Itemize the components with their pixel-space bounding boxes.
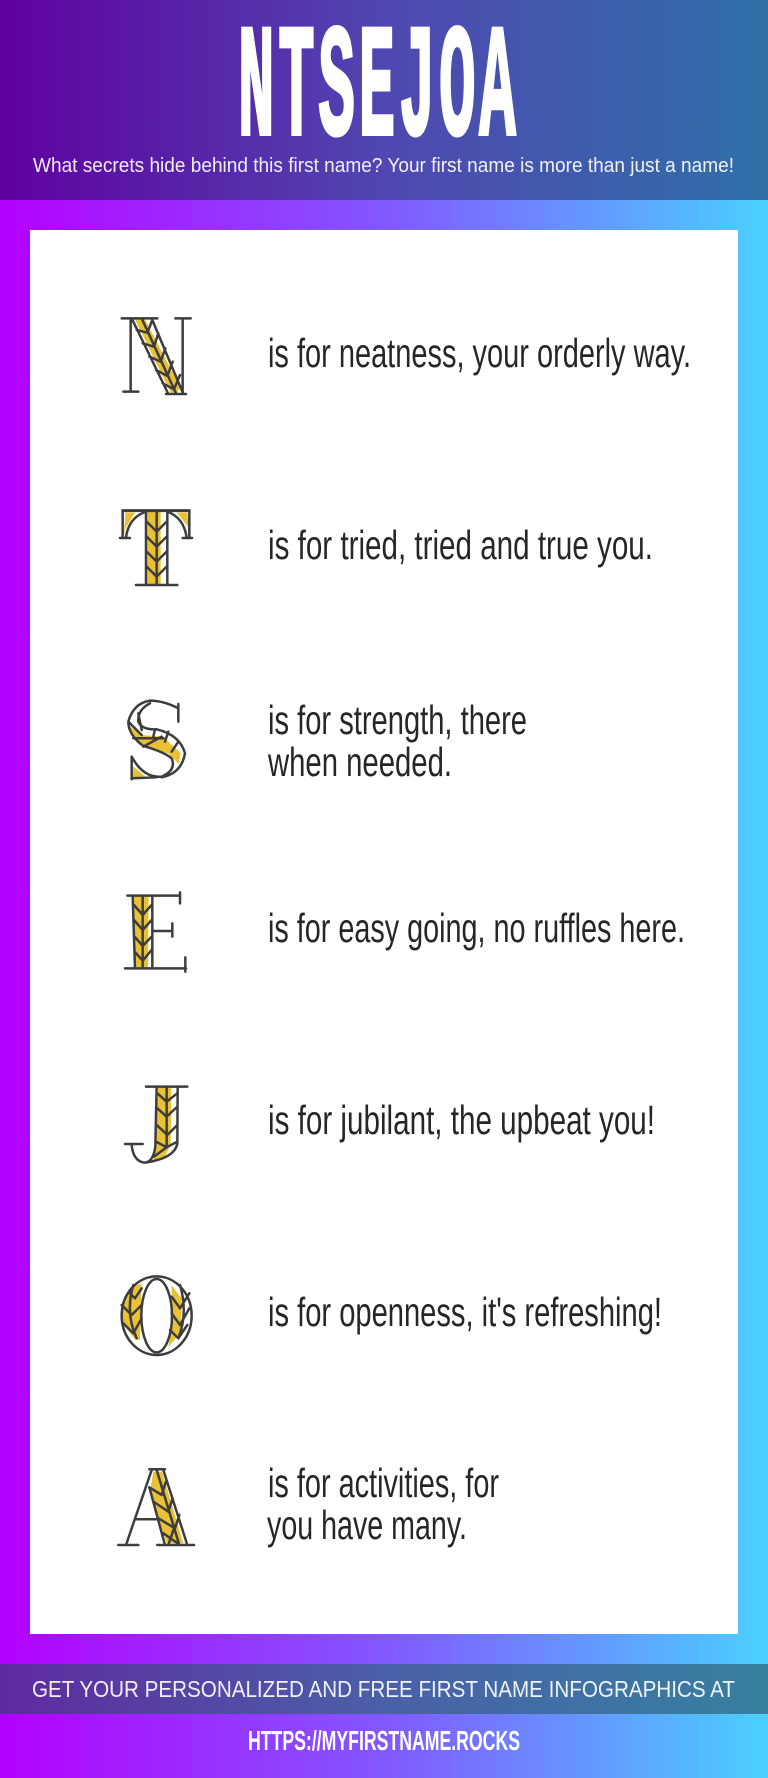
- icon: letter N: [122, 318, 191, 394]
- row: N: [122, 318, 691, 394]
- footer band: [0, 1664, 768, 1714]
- text: [267, 697, 527, 785]
- row: E: [125, 892, 685, 972]
- icon: letter J: [125, 1087, 187, 1163]
- icon: letter S: [128, 701, 185, 779]
- row: O: [122, 1276, 662, 1355]
- text: when needed.: [267, 739, 452, 785]
- text: is for activities, for: [268, 1460, 499, 1506]
- website URL: HTTPS://MYFIRSTNAME.ROCKS: [248, 1725, 520, 1756]
- icon: letter O: [122, 1276, 192, 1355]
- icon: letter E: [125, 892, 186, 972]
- row: J: [125, 1087, 655, 1163]
- text: [267, 1460, 499, 1548]
- row: A: [118, 1460, 499, 1548]
- text: is for strength, there: [268, 697, 527, 743]
- row: T: [120, 511, 653, 585]
- row: S: [128, 697, 527, 785]
- text: you have many.: [267, 1502, 467, 1548]
- title: NTSEJOA: [238, 2, 519, 183]
- header band: [0, 0, 768, 200]
- icon: letter A: [118, 1469, 194, 1545]
- icon: letter T: [120, 511, 192, 585]
- white content panel: [30, 230, 738, 1634]
- subtitle: What secrets hide behind this first name? Your first name is more than just a name!: [33, 155, 734, 177]
